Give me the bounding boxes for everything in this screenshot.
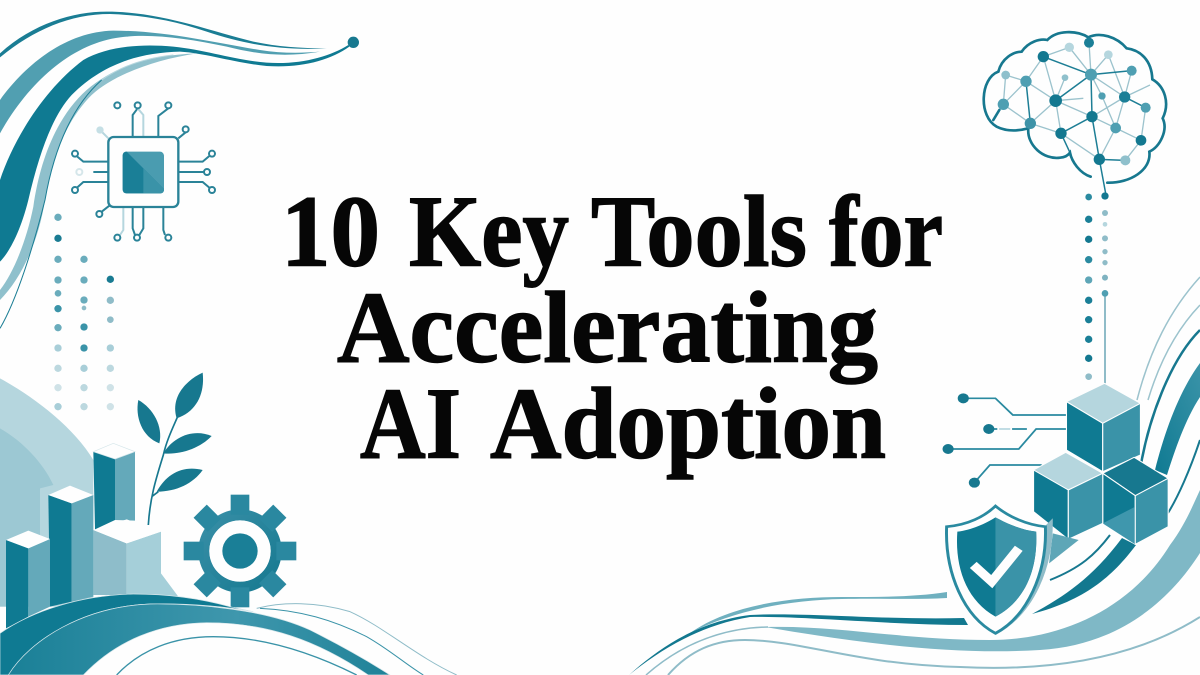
icon: gear <box>184 495 296 607</box>
title: Tools <box>591 176 807 288</box>
title: Accelerating <box>337 272 878 384</box>
circuit lines <box>943 393 1066 488</box>
icon: wave end dot <box>348 37 359 48</box>
dotted column left <box>54 214 114 331</box>
bar chart: isometric bars <box>6 443 178 628</box>
dotted columns and connector right <box>1085 192 1109 383</box>
icon group: circuit lines, cubes, shield <box>943 383 1168 634</box>
top-left flowing waves <box>0 12 359 328</box>
brain outline <box>984 32 1166 183</box>
title: Key <box>409 176 569 288</box>
icon: security shield with check <box>946 506 1052 634</box>
icon: microchip <box>72 102 215 241</box>
background arcs <box>0 378 93 607</box>
bottom-left scene: hills, bars, leaf, gear <box>0 373 457 675</box>
icon: neural network brain <box>984 32 1166 193</box>
isometric cubes <box>1034 383 1168 544</box>
title: 10 <box>281 176 380 288</box>
title: for <box>829 176 943 288</box>
icon: leaf sprig <box>138 373 212 525</box>
title: Adoption <box>490 368 886 480</box>
rolling hills <box>0 594 457 675</box>
network nodes <box>998 38 1151 165</box>
title: AI <box>360 368 461 480</box>
bottom-right flowing waves <box>629 277 1200 675</box>
title <box>281 176 943 480</box>
